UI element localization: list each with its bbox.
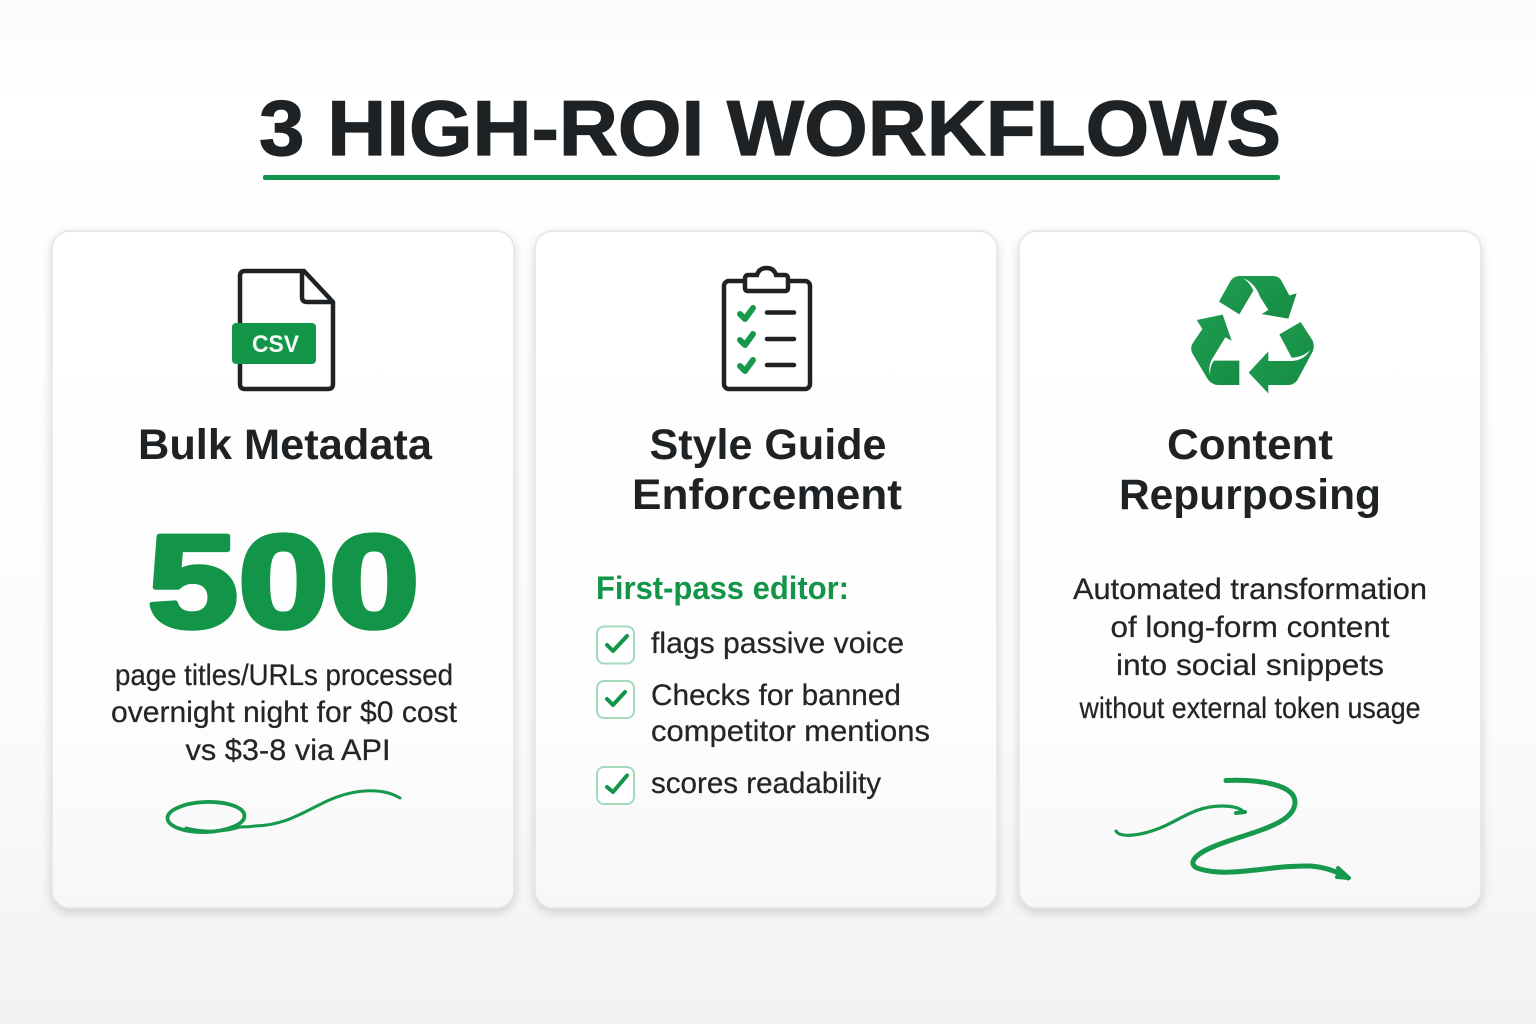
title underline	[263, 175, 1280, 180]
big number 500: 500	[148, 508, 420, 655]
item: flags passive voice: flags passive voice	[651, 627, 904, 660]
icon: CSV file	[232, 271, 333, 389]
checklist	[597, 626, 930, 804]
description: bulk metadata: vs $3-8 via API	[186, 734, 390, 767]
description: content repurposing: without external token usage	[1079, 692, 1420, 725]
subheading: first-pass editor: First-pass editor:	[596, 570, 849, 606]
item: checks for banned competitor mentions: competitor mentions	[651, 715, 930, 748]
heading: style guide enforcement	[632, 421, 902, 519]
heading: bulk metadata: Bulk Metadata	[138, 421, 433, 469]
heading: style guide enforcement: Enforcement	[632, 471, 902, 519]
panel: content repurposing	[1019, 231, 1481, 908]
heading: content repurposing: Repurposing	[1119, 471, 1381, 519]
description: content repurposing	[1073, 573, 1427, 725]
item: checks for banned competitor mentions	[597, 679, 930, 748]
description: bulk metadata: page titles/URLs processed	[115, 659, 453, 692]
description: bulk metadata: overnight night for $0 cost	[111, 696, 458, 729]
icon: recycle	[1191, 276, 1314, 393]
panel: bulk metadata	[52, 231, 514, 908]
description: content repurposing: of long-form content	[1110, 611, 1390, 644]
heading: content repurposing	[1119, 421, 1381, 519]
description: content repurposing: Automated transformation	[1073, 573, 1427, 606]
description: bulk metadata	[111, 659, 458, 767]
icon: CSV file: CSV	[252, 331, 299, 358]
scribble: loop underline	[167, 791, 400, 833]
scribble: curly arrow	[1116, 780, 1349, 878]
heading: style guide enforcement: Style Guide	[650, 421, 886, 469]
panel: style guide enforcement	[535, 231, 997, 908]
item: scores readability: scores readability	[651, 767, 881, 800]
icon: clipboard checklist	[724, 268, 810, 389]
heading: content repurposing: Content	[1167, 421, 1333, 469]
description: content repurposing: into social snippets	[1116, 649, 1384, 682]
item: checks for banned competitor mentions: Checks for banned	[651, 679, 901, 712]
title: 3 HIGH-ROI WORKFLOWS	[259, 84, 1281, 172]
